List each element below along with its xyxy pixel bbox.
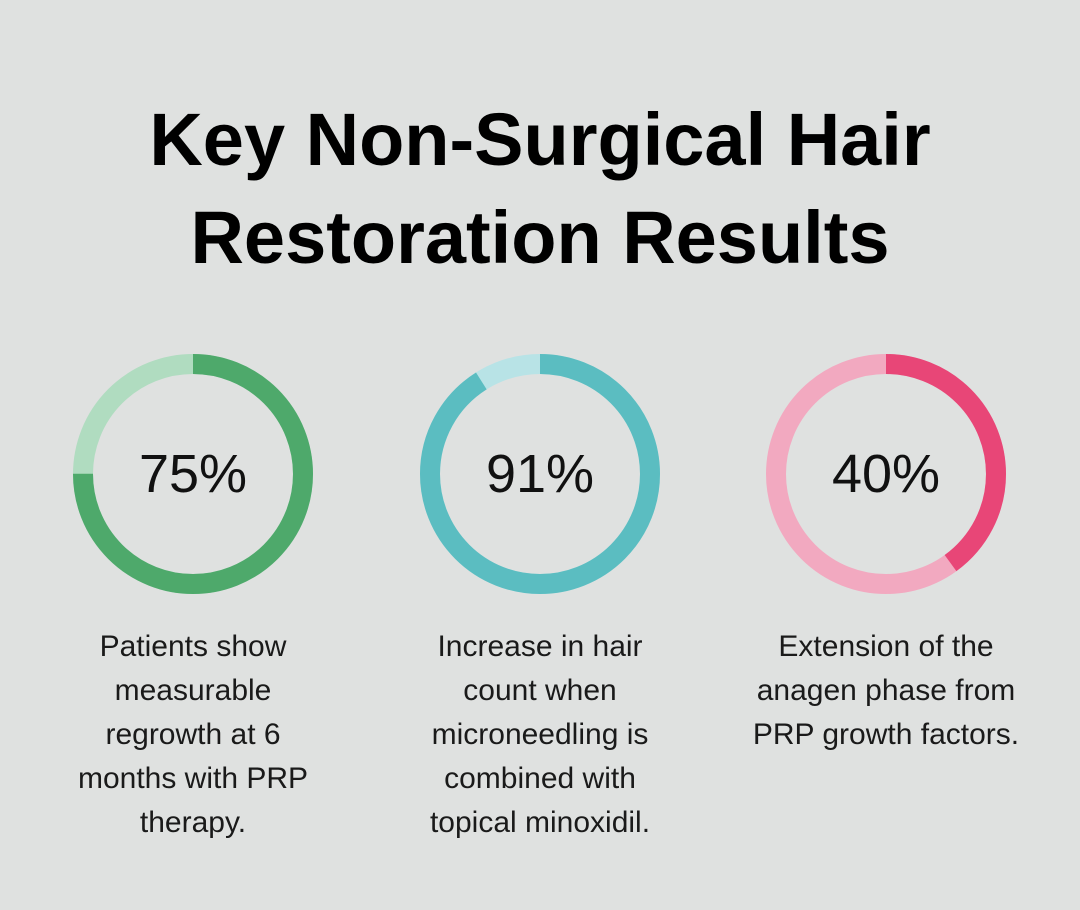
- caption 2: combined with: [444, 762, 636, 795]
- caption 3: anagen phase from: [757, 674, 1015, 707]
- caption 3: [753, 630, 1019, 751]
- donut: 40%: [766, 354, 1006, 594]
- caption 2: microneedling is: [432, 718, 648, 751]
- caption 1: regrowth at 6: [105, 718, 281, 751]
- donut: 75%: 75%: [139, 444, 247, 504]
- caption 2: topical minoxidil.: [430, 806, 650, 839]
- title: Restoration Results: [190, 196, 890, 279]
- donut: 75%: [73, 354, 313, 594]
- caption 1: [78, 630, 308, 839]
- donut: 40%: 40%: [832, 444, 940, 504]
- caption 2: [430, 630, 650, 839]
- caption 1: therapy.: [140, 806, 246, 839]
- caption 2: Increase in hair: [437, 630, 643, 663]
- caption 3: Extension of the: [778, 630, 994, 663]
- caption 2: count when: [463, 674, 617, 707]
- caption 1: measurable: [115, 674, 271, 707]
- title: [149, 98, 931, 279]
- donut: 91%: 91%: [486, 444, 594, 504]
- caption 1: months with PRP: [78, 762, 308, 795]
- caption 3: PRP growth factors.: [753, 718, 1019, 751]
- donut: 91%: [420, 354, 660, 594]
- title: Key Non-Surgical Hair: [149, 98, 931, 181]
- caption 1: Patients show: [100, 630, 286, 663]
